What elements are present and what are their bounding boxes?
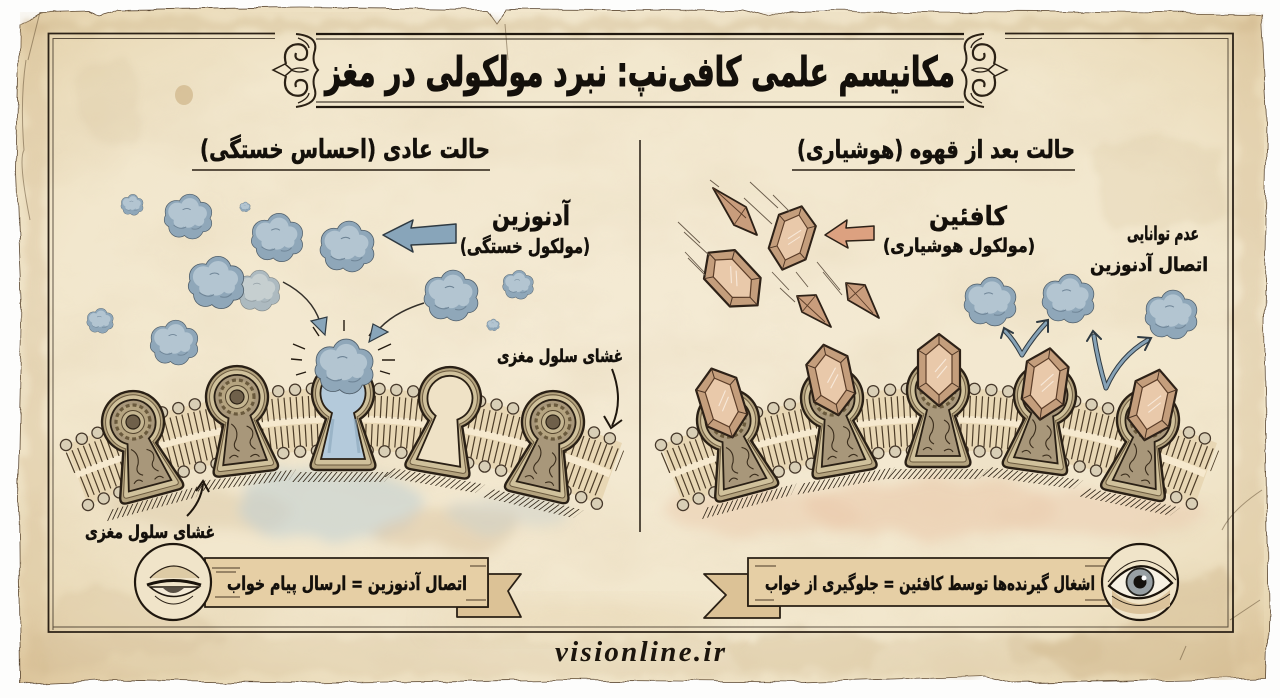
seated caffeine crystals [691,334,1180,445]
ribbon: adenosine result [205,558,521,617]
title banner [273,34,1007,107]
label: adenosine cannot bind [1090,223,1208,276]
panel: after coffee state [661,135,1217,620]
label: membrane upper: غشای سلول مغزی [497,346,623,367]
bounce arrows [1001,320,1151,388]
label: adenosine cannot bind: عدم توانایی [1127,223,1199,245]
label: adenosine cannot bind: اتصال آدنوزین [1090,252,1208,276]
receptor 2 [187,361,292,486]
motion lines [678,180,842,302]
receptor 4 empty [390,359,500,489]
icon: open eye [1102,544,1178,620]
label: caffeine: (مولکول هوشیاری) [883,235,1035,257]
burst lines [291,320,395,375]
ribbon: caffeine result [704,558,1115,618]
label: adenosine: (مولکول خستگی) [460,234,590,258]
label: caffeine [883,202,1035,257]
icon: closed eye [135,544,211,620]
arrow: to caffeine [825,220,874,248]
title ornament right [962,34,1007,107]
decorative frame [48,34,1233,632]
label: adenosine [460,199,590,258]
center divider [639,140,641,532]
ribbon: caffeine result: اشغال گیرنده‌ها توسط کافئین = جلوگیری از خواب [765,572,1095,595]
flying caffeine crystals [693,188,879,327]
cell membrane [661,388,1217,505]
heading: normal state: حالت عادی (احساس خستگی) [200,134,490,165]
cell membrane [66,388,622,505]
curved arrows to receptor [283,282,424,342]
title frame [316,34,964,107]
receptor 1 [80,380,199,515]
watercolor wash [110,471,570,550]
title ornament left [273,34,318,107]
bound adenosine [315,340,373,393]
arrow: to adenosine [383,220,456,252]
arrow: membrane lower [187,481,209,516]
label: adenosine: آدنوزین [492,199,571,232]
label: caffeine: کافئین [929,202,1008,232]
label: membrane lower: غشای سلول مغزی [85,522,215,543]
footer website: visionline.ir [555,636,726,668]
panel: normal state [66,134,623,620]
repelled adenosine [965,274,1196,339]
watercolor wash [665,480,1210,536]
heading: after coffee: حالت بعد از قهوه (هوشیاری) [797,135,1075,165]
receptor 3 with adenosine [297,362,389,477]
receptors blocked [675,378,794,513]
title text: مکانیسم علمی کافی‌نپ: نبرد مولکولی در مغز [324,48,955,96]
receptor 5 [489,381,604,514]
adenosine molecules [87,194,533,365]
arrow: membrane upper [604,369,622,428]
ribbon: adenosine result: اتصال آدنوزین = ارسال پیام خواب [227,571,467,595]
